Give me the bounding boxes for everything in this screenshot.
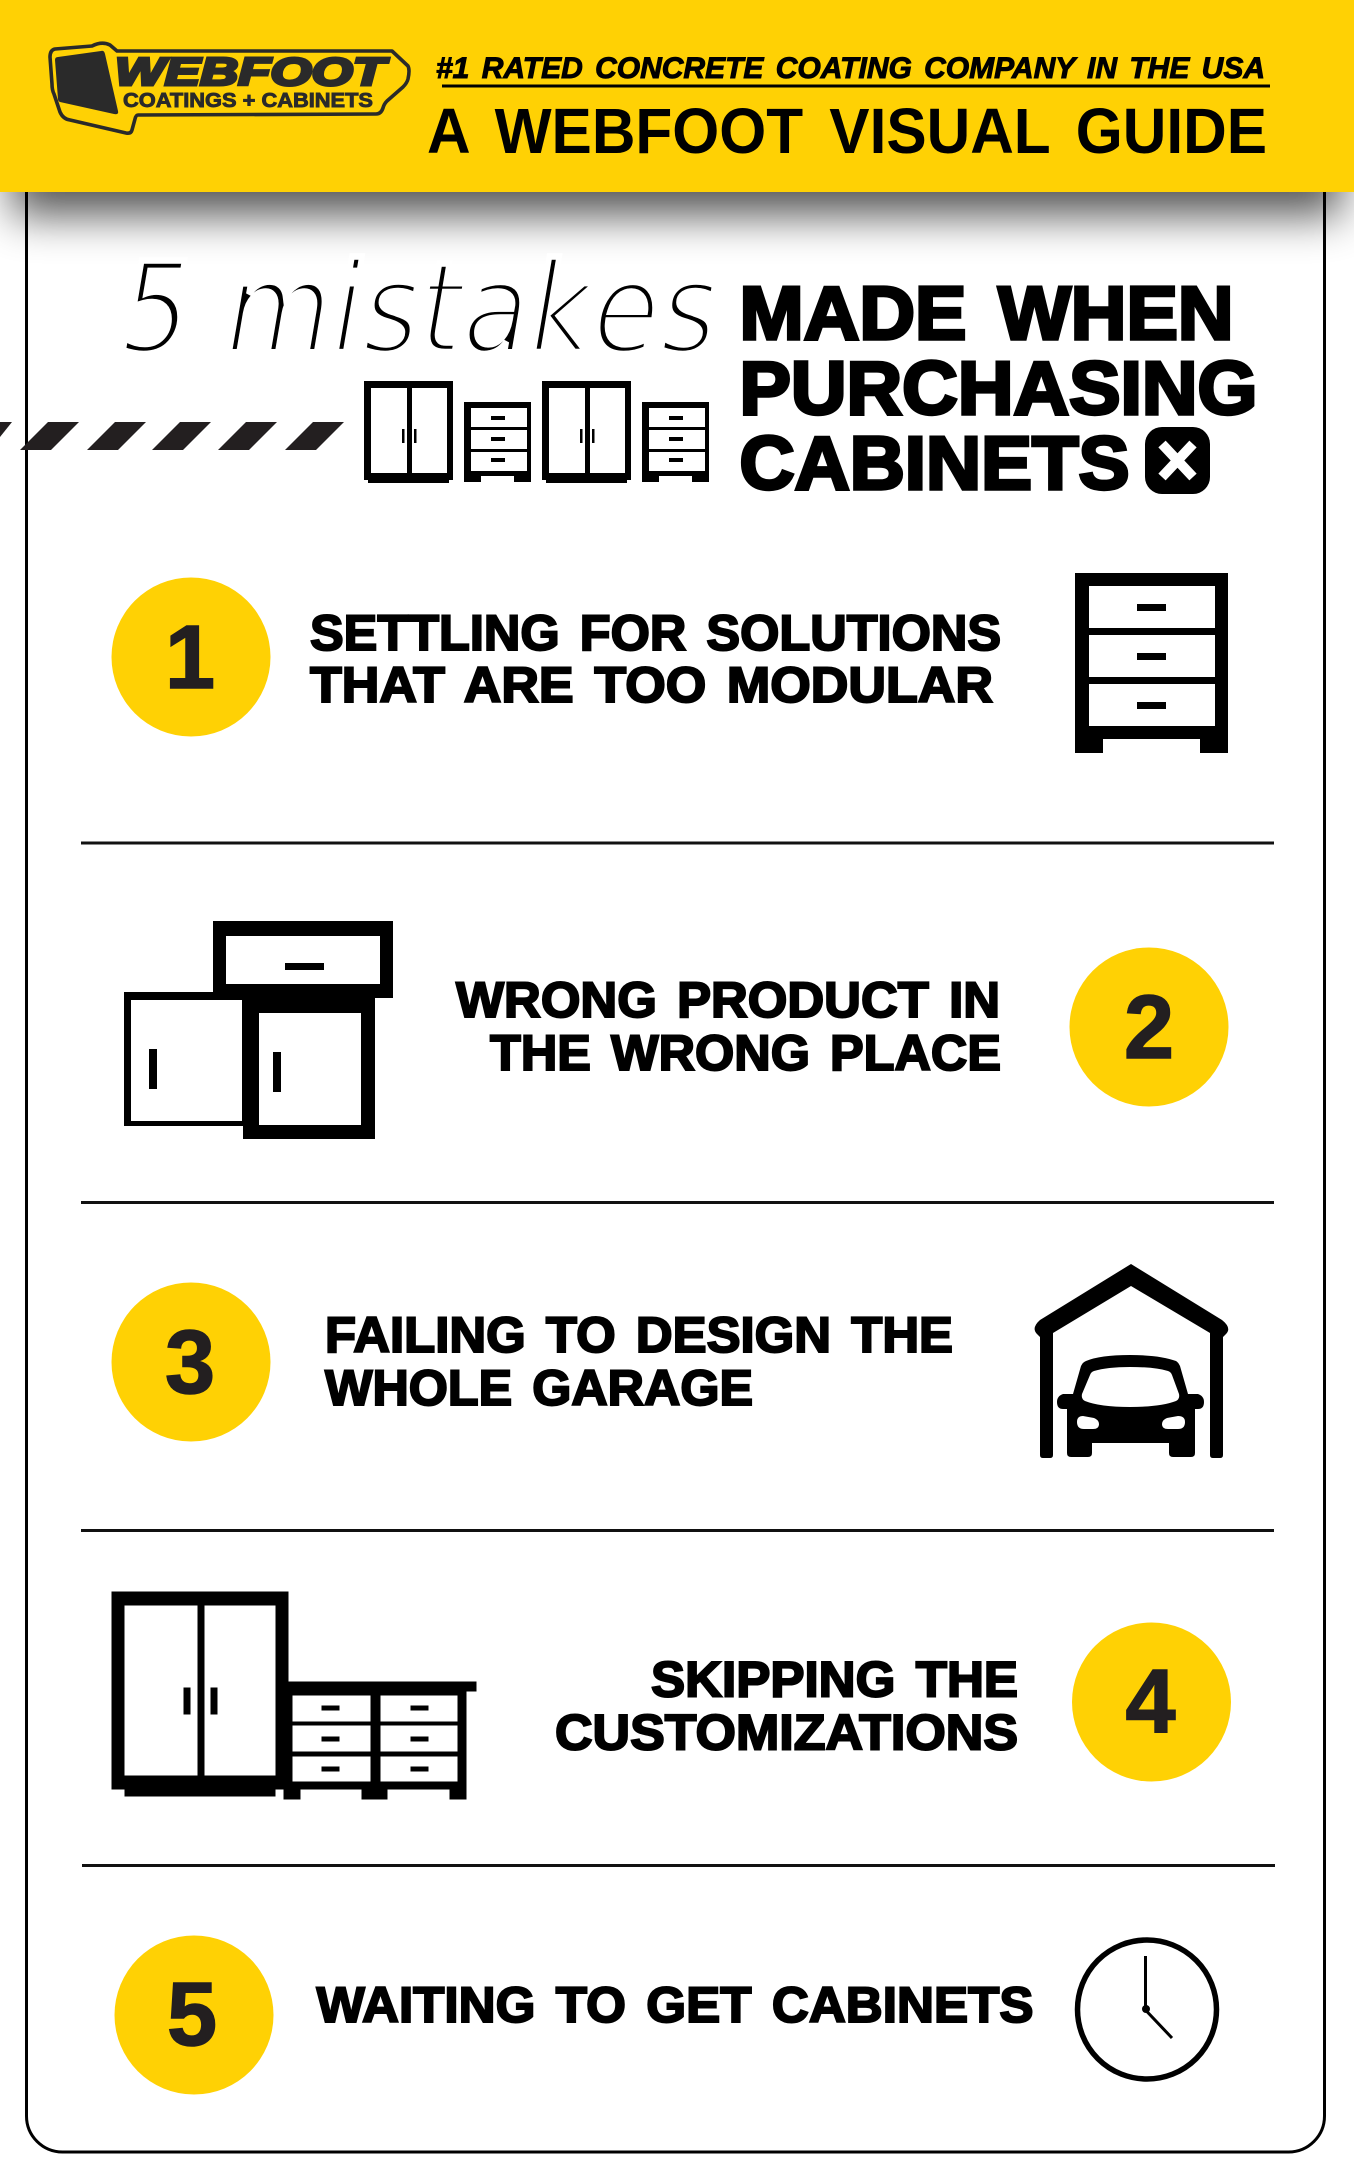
- row 5: [114, 1936, 1216, 2094]
- header shadow: [12, 130, 1342, 215]
- icon: header cabinets row: [364, 381, 709, 483]
- number badge 5: [114, 1936, 274, 2094]
- row 4: [112, 1592, 1231, 1800]
- logo: Webfoot: WEBFOOT: [115, 51, 389, 94]
- number badge 3: [112, 1282, 270, 1442]
- divider: [81, 842, 1274, 844]
- text: mistake 2: [456, 972, 1001, 1081]
- number badge 4: [1072, 1622, 1231, 1782]
- logo: Webfoot: COATINGS + CABINETS: [123, 89, 373, 112]
- tagline underline: [442, 84, 1270, 88]
- cabinet: drawers A: [464, 402, 531, 482]
- title: made when purchasing cabinets: [740, 271, 1258, 505]
- text: mistake 2: WRONG PRODUCT IN: [456, 972, 1000, 1028]
- icon: dresser: [1075, 573, 1228, 753]
- header title: A WEBFOOT VISUAL GUIDE: [427, 95, 1267, 167]
- icon: clock: [1078, 1940, 1216, 2079]
- title: made when purchasing cabinets: MADE WHEN: [740, 271, 1234, 355]
- cabinet: tall A: [364, 381, 453, 483]
- tagline: #1 RATED CONCRETE COATING COMPANY IN THE USA: [436, 52, 1265, 85]
- logo: Webfoot: [50, 43, 409, 133]
- text: mistake 3: FAILING TO DESIGN THE: [325, 1307, 953, 1363]
- icon: mismatched cabinets: [124, 921, 393, 1139]
- icon: garage with car: [1035, 1264, 1228, 1458]
- title: made when purchasing cabinets: PURCHASING: [740, 346, 1258, 430]
- text: mistake 1: SETTLING FOR SOLUTIONS: [310, 605, 1001, 661]
- header band: [0, 0, 1354, 192]
- text: mistake 2: THE WRONG PLACE: [490, 1025, 1001, 1081]
- row 1: [112, 573, 1228, 753]
- title: 5 mistakes: 5 mistakes: [121, 235, 717, 382]
- row 3: [112, 1264, 1228, 1458]
- text: mistake 4: SKIPPING THE: [651, 1652, 1018, 1708]
- icon: tall cabinet and drawers: [112, 1592, 476, 1800]
- text: mistake 4: [555, 1652, 1018, 1760]
- cabinet: drawers B: [642, 402, 709, 482]
- cabinet: tall B: [542, 381, 631, 483]
- divider: [81, 1529, 1274, 1532]
- text: mistake 3: [325, 1307, 953, 1416]
- text: mistake 1: [310, 605, 1001, 713]
- row 2: [124, 921, 1228, 1139]
- text: mistake 5: WAITING TO GET CABINETS: [316, 1977, 1034, 2033]
- text: mistake 1: THAT ARE TOO MODULAR: [310, 657, 993, 713]
- divider: [82, 1864, 1275, 1867]
- number badge 2: 2: [1124, 978, 1174, 1078]
- divider: [81, 1201, 1274, 1204]
- title: made when purchasing cabinets: CABINETS: [740, 421, 1130, 505]
- text: mistake 3: WHOLE GARAGE: [325, 1360, 753, 1416]
- number badge 1: 1: [165, 608, 215, 708]
- hazard stripes: [0, 422, 344, 450]
- number badge 1: [112, 578, 270, 736]
- number badge 3: 3: [165, 1313, 215, 1413]
- number badge 5: 5: [167, 1965, 217, 2065]
- number badge 2: [1070, 948, 1228, 1106]
- icon: X badge: [1145, 427, 1210, 494]
- text: mistake 4: CUSTOMIZATIONS: [555, 1704, 1018, 1760]
- number badge 4: 4: [1126, 1652, 1176, 1752]
